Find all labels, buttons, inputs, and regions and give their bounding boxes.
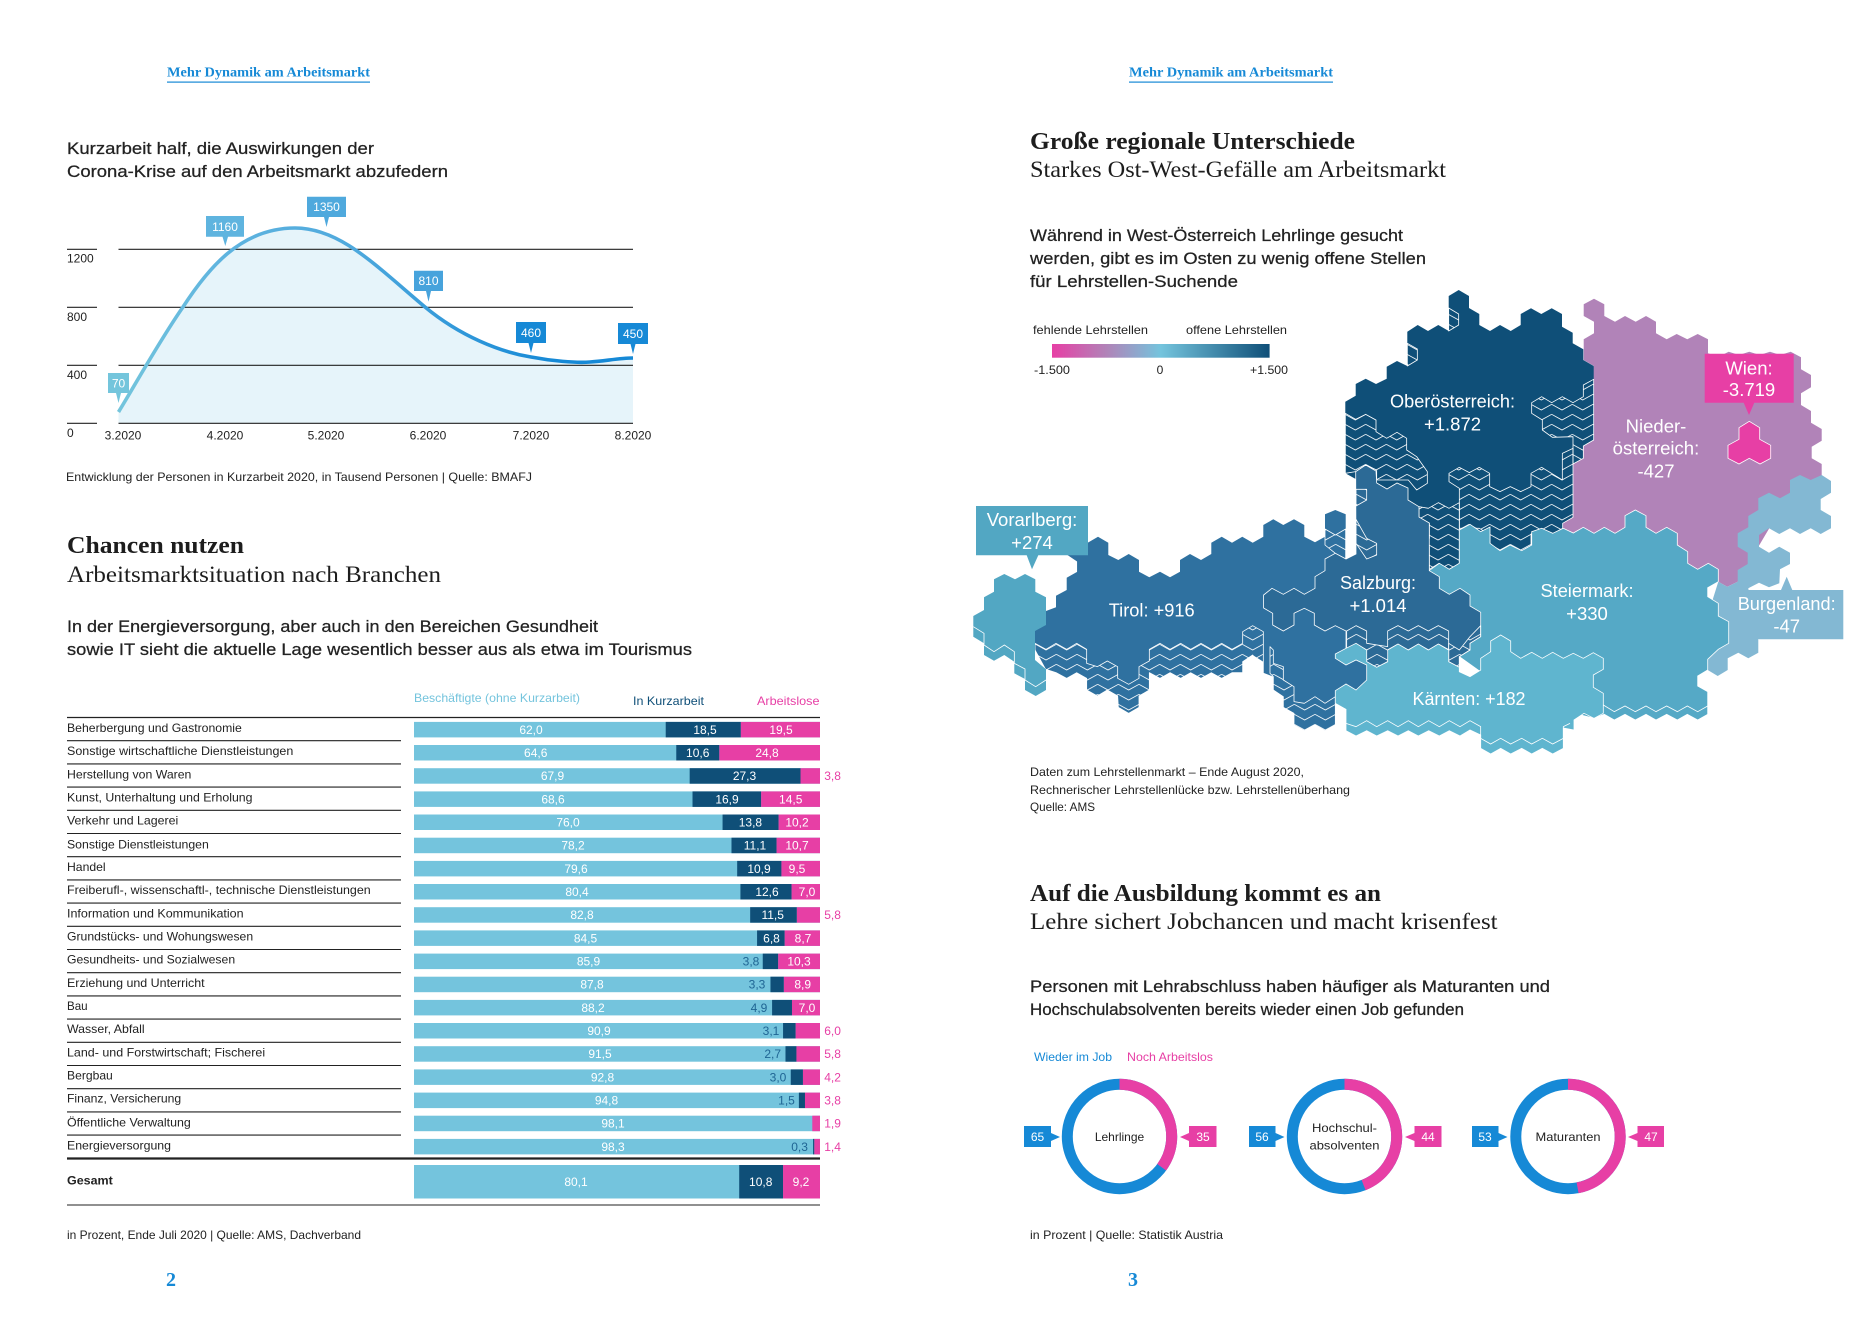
row: Sonstige wirtschaftliche Dienstleistungen: 10,6 — [686, 746, 710, 760]
legend — [414, 691, 820, 708]
map legend: 0 — [1157, 363, 1164, 377]
row: Information und Kommunikation: Information und Kommunikation — [67, 906, 244, 920]
heading: Große regionale Unterschiede: Große regionale Unterschiede — [1030, 129, 1355, 155]
value 53 — [1472, 1126, 1508, 1147]
row: Bau: 88,2 — [581, 1001, 605, 1015]
row: Bergbau — [67, 1069, 841, 1085]
area chart: Kurzarbeit — [67, 197, 652, 442]
row: Energieversorgung: 98,3 — [601, 1140, 625, 1154]
row: Grundstücks- und Wohungswesen — [67, 930, 820, 946]
page number 2: 2 — [166, 1269, 176, 1291]
row: Handel: 79,6 — [564, 862, 588, 876]
row: Sonstige wirtschaftliche Dienstleistungen: Sonstige wirtschaftliche Dienstleistungen — [67, 744, 293, 758]
chart grid and y axis: 1200 — [67, 252, 94, 266]
x axis labels: 5.2020 — [308, 428, 345, 442]
source: Branchen: in Prozent, Ende Juli 2020 | Quelle: AMS, Dachverband — [67, 1228, 361, 1242]
row: Gesamt: Gesamt — [67, 1174, 113, 1188]
map label: Kärnten: Kärnten: +182 — [1412, 688, 1526, 709]
region: Wien — [1728, 421, 1771, 464]
row: Bau: 7,0 — [799, 1001, 816, 1015]
value 44 — [1405, 1126, 1442, 1147]
region: Salzburg — [1264, 465, 1481, 670]
source: Lehrstellen: Rechnerischer Lehrstellenlücke bzw. Lehrstellenüberhang — [1030, 783, 1350, 797]
row: Herstellung von Waren: Herstellung von Waren — [67, 767, 191, 781]
chart grid and y axis: 400 — [67, 368, 87, 382]
row: Energieversorgung: 0,3 — [791, 1140, 808, 1154]
callout: Wien: -3.719 — [1723, 379, 1775, 400]
marker 460: 460 — [521, 326, 541, 340]
marker 70 — [108, 373, 129, 403]
marker 460 — [516, 322, 546, 353]
row: Kunst, Unterhaltung und Erholung: 14,5 — [779, 792, 803, 806]
donut: Maturanten — [1472, 1084, 1664, 1189]
row: Sonstige wirtschaftliche Dienstleistungen — [67, 744, 820, 760]
row: Beherbergung und Gastronomie: Beherbergung und Gastronomie — [67, 721, 242, 735]
row: Bau: 4,9 — [751, 1001, 768, 1015]
row: Energieversorgung — [67, 1138, 841, 1154]
donut: Hochschulabsolventen: Hochschul- — [1312, 1121, 1377, 1135]
callout: Vorarlberg — [976, 506, 1088, 569]
row: Finanz, Versicherung: 94,8 — [595, 1094, 619, 1108]
row: Wasser, Abfall: 90,9 — [587, 1024, 611, 1038]
row: Sonstige Dienstleistungen: 78,2 — [561, 839, 585, 853]
intro text: Lehrstellen — [1029, 227, 1426, 291]
region: Kärnten — [1335, 635, 1603, 754]
row: Wasser, Abfall: Wasser, Abfall — [67, 1022, 145, 1036]
row: Öffentliche Verwaltung: 1,9 — [824, 1117, 841, 1131]
chart grid and y axis — [67, 249, 633, 440]
page header left: Mehr Dynamik am Arbeitsmarkt — [167, 64, 371, 80]
row: Verkehr und Lagerei: 13,8 — [739, 816, 762, 830]
map label: Steiermark — [1540, 580, 1634, 624]
marker 450 — [618, 323, 648, 354]
legend: Arbeitslose — [757, 694, 820, 708]
row: Erziehung und Unterricht: Erziehung und Unterricht — [67, 976, 205, 990]
value 65 — [1024, 1126, 1060, 1147]
row: Land- und Forstwirtschaft; Fischerei: Land- und Forstwirtschaft; Fischerei — [67, 1045, 265, 1059]
row: Öffentliche Verwaltung: Öffentliche Verwaltung — [67, 1115, 191, 1129]
source: Lehrstellen: Daten zum Lehrstellenmarkt – Ende August 2020, — [1030, 765, 1304, 779]
map label: Steiermark: +330 — [1566, 603, 1608, 624]
row: Bau: Bau — [67, 999, 88, 1013]
x axis labels: 3.2020 — [105, 428, 142, 442]
chart line — [118, 228, 633, 412]
row: Beherbergung und Gastronomie: 18,5 — [693, 723, 717, 737]
intro text: Lehrstellen: für Lehrstellen-Suchende — [1030, 273, 1238, 291]
row: Erziehung und Unterricht: 3,3 — [749, 978, 766, 992]
row: Gesamt — [67, 1165, 820, 1198]
heading: Ausbildung: Auf die Ausbildung kommt es an — [1030, 881, 1381, 907]
legend: Beschäftigte (ohne Kurzarbeit) — [414, 691, 580, 705]
callout: Burgenland — [1738, 577, 1843, 639]
donut: Hochschulabsolventen: absolventen — [1310, 1138, 1380, 1152]
row: Energieversorgung: 1,4 — [824, 1140, 841, 1154]
row: Information und Kommunikation — [67, 906, 841, 923]
map label: Oberösterreich: +1.872 — [1424, 414, 1481, 435]
map legend: +1.500 — [1250, 363, 1288, 377]
x axis labels: 7.2020 — [513, 428, 550, 442]
row: Verkehr und Lagerei: Verkehr und Lagerei — [67, 814, 178, 828]
row: Verkehr und Lagerei — [67, 814, 820, 830]
map label: Salzburg — [1340, 572, 1416, 616]
map legend: fehlende Lehrstellen — [1033, 323, 1148, 337]
map label: Steiermark: Steiermark: — [1540, 580, 1634, 601]
heading: Kurzarbeit: Kurzarbeit half, die Auswirkungen der — [67, 140, 375, 158]
donut: Lehrlinge: Lehrlinge — [1095, 1130, 1145, 1144]
marker 70: 70 — [112, 376, 125, 390]
row: Herstellung von Waren — [67, 767, 841, 784]
x axis labels: 4.2020 — [207, 428, 244, 442]
map legend: -1.500 — [1034, 363, 1070, 377]
map label: Niederösterreich: österreich: — [1613, 438, 1699, 459]
row: Beherbergung und Gastronomie: 19,5 — [769, 723, 793, 737]
marker 1350 — [307, 197, 346, 227]
row: Information und Kommunikation: 11,5 — [761, 908, 784, 922]
marker 450: 450 — [623, 327, 643, 341]
intro text: Lehrstellen: Während in West-Österreich Lehrlinge gesucht — [1030, 227, 1403, 245]
chart grid and y axis: 0 — [67, 426, 74, 440]
row: Handel: Handel — [67, 860, 106, 874]
callout: Vorarlberg: Vorarlberg: — [987, 509, 1077, 530]
row: Bergbau: Bergbau — [67, 1069, 113, 1083]
marker 1160 — [206, 216, 244, 246]
row: Gesundheits- und Sozialwesen: 10,3 — [787, 954, 811, 968]
donut: Maturanten: Maturanten — [1536, 1130, 1600, 1144]
value 44: 44 — [1421, 1130, 1435, 1144]
row: Sonstige Dienstleistungen: Sonstige Dienstleistungen — [67, 838, 209, 852]
row: Freiberufl-, wissenschaftl-, technische Dienstleistungen — [67, 883, 820, 900]
marker 1350: 1350 — [313, 200, 340, 214]
intro text: Lehrstellen: werden, gibt es im Osten zu wenig offene Stellen — [1029, 250, 1426, 268]
row: Grundstücks- und Wohungswesen: 6,8 — [763, 931, 780, 945]
row: Herstellung von Waren: 67,9 — [541, 769, 565, 783]
row: Erziehung und Unterricht: 87,8 — [580, 978, 604, 992]
row: Gesundheits- und Sozialwesen: 85,9 — [577, 954, 601, 968]
row: Gesundheits- und Sozialwesen — [67, 953, 820, 969]
row: Freiberufl-, wissenschaftl-, technische Dienstleistungen: 12,6 — [755, 885, 779, 899]
callout: Burgenland: Burgenland: — [1738, 593, 1836, 614]
row: Grundstücks- und Wohungswesen: 8,7 — [795, 931, 812, 945]
row: Freiberufl-, wissenschaftl-, technische Dienstleistungen: Freiberufl-, wissenschaftl-, technische Dienstleistungen — [67, 883, 371, 897]
row: Wasser, Abfall: 6,0 — [824, 1024, 841, 1038]
donut legend: Noch Arbeitslos — [1127, 1050, 1213, 1064]
row: Beherbergung und Gastronomie: 62,0 — [519, 723, 543, 737]
row: Information und Kommunikation: 82,8 — [570, 908, 594, 922]
value 47: 47 — [1644, 1130, 1658, 1144]
row: Handel: 10,9 — [747, 862, 771, 876]
row: Bau — [67, 999, 820, 1015]
row: Bergbau: 3,0 — [770, 1070, 787, 1084]
intro text: Lehrabschluss: Hochschulabsolventen bereits wieder einen Job gefunden — [1030, 1001, 1464, 1019]
page number 3: 3 — [1128, 1269, 1138, 1291]
region: Niederösterreich — [1560, 299, 1822, 587]
intro text: Branchen — [67, 618, 692, 659]
row: Gesundheits- und Sozialwesen: 3,8 — [743, 954, 760, 968]
row: Herstellung von Waren: 3,8 — [824, 769, 841, 783]
donut: Hochschulabsolventen — [1249, 1084, 1442, 1189]
callout: Vorarlberg: +274 — [1011, 532, 1053, 553]
region: Tirol — [1030, 510, 1367, 731]
row: Land- und Forstwirtschaft; Fischerei: 5,8 — [824, 1047, 841, 1061]
row: Sonstige Dienstleistungen — [67, 838, 820, 853]
hex map of Austria — [973, 290, 1843, 754]
row: Herstellung von Waren: 27,3 — [733, 769, 757, 783]
row: Erziehung und Unterricht — [67, 976, 820, 992]
callout: Wien: Wien: — [1725, 358, 1773, 378]
map legend — [1033, 323, 1288, 377]
heading: Kurzarbeit — [67, 140, 448, 181]
chart area fill — [118, 228, 633, 423]
row: Öffentliche Verwaltung — [67, 1115, 841, 1131]
value 53: 53 — [1478, 1130, 1492, 1144]
intro text: Branchen: sowie IT sieht die aktuelle Lage wesentlich besser aus als etwa im Tourismus — [67, 641, 692, 659]
region: Steiermark — [1429, 510, 1729, 720]
row: Beherbergung und Gastronomie — [67, 721, 820, 737]
row: Sonstige Dienstleistungen: 11,1 — [744, 839, 767, 853]
map label: Niederösterreich: -427 — [1637, 461, 1675, 482]
subtitle: Arbeitsmarktsituation: Arbeitsmarktsituation nach Branchen — [67, 562, 441, 588]
row: Wasser, Abfall: 3,1 — [763, 1024, 780, 1038]
row: Bergbau: 92,8 — [591, 1070, 615, 1084]
row: Finanz, Versicherung: Finanz, Versicherung — [67, 1092, 181, 1106]
marker 810 — [414, 271, 443, 302]
map label: Niederösterreich — [1613, 416, 1699, 482]
row: Finanz, Versicherung: 1,5 — [778, 1094, 795, 1108]
x axis labels — [105, 428, 652, 442]
donut: Lehrlinge — [1024, 1084, 1216, 1189]
page header right: Mehr Dynamik am Arbeitsmarkt — [1129, 64, 1334, 80]
row: Kunst, Unterhaltung und Erholung: Kunst, Unterhaltung und Erholung — [67, 790, 252, 804]
value 65: 65 — [1031, 1130, 1044, 1144]
heading: Chancen nutzen: Chancen nutzen — [67, 533, 244, 559]
row: Verkehr und Lagerei: 76,0 — [556, 816, 580, 830]
row: Gesamt: 80,1 — [564, 1175, 588, 1189]
row: Erziehung und Unterricht: 8,9 — [794, 978, 811, 992]
row: Freiberufl-, wissenschaftl-, technische Dienstleistungen: 7,0 — [799, 885, 816, 899]
subtitle: Lehre: Lehre sichert Jobchancen und macht krisenfest — [1030, 909, 1498, 935]
marker 1160: 1160 — [212, 220, 238, 234]
row: Grundstücks- und Wohungswesen: 84,5 — [574, 931, 598, 945]
map label: Salzburg: Salzburg: — [1340, 572, 1416, 593]
value 35: 35 — [1196, 1130, 1210, 1144]
intro text: Lehrabschluss — [1030, 978, 1550, 1019]
region: Burgenland — [1700, 475, 1831, 676]
subtitle: Ost-West-Gefälle: Starkes Ost-West-Gefälle am Arbeitsmarkt — [1030, 157, 1446, 183]
row: Finanz, Versicherung: 3,8 — [824, 1094, 841, 1108]
intro text: Lehrabschluss: Personen mit Lehrabschluss haben häufiger als Maturanten und — [1030, 978, 1550, 996]
source: Kurzarbeit: Entwicklung der Personen in Kurzarbeit 2020, in Tausend Personen | Quelle: BMAFJ — [66, 470, 532, 484]
row: Kunst, Unterhaltung und Erholung: 16,9 — [715, 792, 739, 806]
marker 810: 810 — [418, 274, 439, 288]
row: Gesundheits- und Sozialwesen: Gesundheits- und Sozialwesen — [67, 953, 235, 967]
chart grid and y axis: 800 — [67, 310, 87, 324]
row: Öffentliche Verwaltung: 98,1 — [601, 1117, 625, 1131]
value 47 — [1628, 1126, 1664, 1147]
row: Land- und Forstwirtschaft; Fischerei: 2,7 — [764, 1047, 781, 1061]
value 56: 56 — [1255, 1130, 1269, 1144]
row: Land- und Forstwirtschaft; Fischerei: 91,5 — [588, 1047, 612, 1061]
row: Verkehr und Lagerei: 10,2 — [785, 816, 809, 830]
donut legend: Wieder im Job — [1034, 1050, 1112, 1064]
x axis labels: 8.2020 — [615, 428, 652, 442]
callout: Burgenland: -47 — [1773, 616, 1800, 637]
row: Kunst, Unterhaltung und Erholung: 68,6 — [541, 792, 565, 806]
map legend: offene Lehrstellen — [1186, 323, 1287, 337]
row: Grundstücks- und Wohungswesen: Grundstücks- und Wohungswesen — [67, 930, 253, 944]
region: Oberösterreich — [1345, 290, 1594, 575]
row: Gesamt: 10,8 — [749, 1175, 773, 1189]
intro text: Branchen: In der Energieversorgung, aber auch in den Bereichen Gesundheit — [67, 618, 598, 636]
legend: In Kurzarbeit — [633, 694, 705, 708]
row: Gesamt: 9,2 — [793, 1175, 810, 1189]
row: Handel — [67, 860, 820, 876]
source: Lehrstellen: Quelle: AMS — [1030, 800, 1095, 814]
heading: Kurzarbeit: Corona-Krise auf den Arbeitsmarkt abzufedern — [67, 163, 448, 181]
donut legend — [1034, 1050, 1213, 1064]
row: Finanz, Versicherung — [67, 1092, 841, 1108]
value 56 — [1249, 1126, 1284, 1147]
row: Handel: 9,5 — [789, 862, 806, 876]
x axis labels: 6.2020 — [410, 428, 447, 442]
row: Land- und Forstwirtschaft; Fischerei — [67, 1045, 841, 1062]
value 35 — [1180, 1126, 1216, 1147]
map label: Niederösterreich: Nieder- — [1626, 416, 1686, 437]
source: Statistik Austria: in Prozent | Quelle: Statistik Austria — [1030, 1228, 1223, 1242]
row: Information und Kommunikation: 5,8 — [824, 908, 841, 922]
row: Sonstige Dienstleistungen: 10,7 — [785, 839, 809, 853]
row: Sonstige wirtschaftliche Dienstleistungen: 64,6 — [524, 746, 548, 760]
map label: Oberösterreich — [1390, 391, 1515, 435]
row: Kunst, Unterhaltung und Erholung — [67, 790, 820, 807]
row: Energieversorgung: Energieversorgung — [67, 1138, 171, 1152]
region: Vorarlberg — [973, 574, 1046, 696]
map label: Oberösterreich: Oberösterreich: — [1390, 391, 1515, 412]
row: Freiberufl-, wissenschaftl-, technische Dienstleistungen: 80,4 — [565, 885, 589, 899]
map label: Salzburg: +1.014 — [1349, 595, 1407, 616]
map label: Tirol: Tirol: +916 — [1109, 600, 1195, 621]
row: Bergbau: 4,2 — [824, 1070, 841, 1084]
callout: Wien — [1705, 354, 1794, 415]
row: Sonstige wirtschaftliche Dienstleistungen: 24,8 — [755, 746, 779, 760]
stacked bar chart: Branchen — [67, 691, 841, 1205]
source: Lehrstellen — [1030, 765, 1350, 814]
row: Wasser, Abfall — [67, 1022, 841, 1038]
